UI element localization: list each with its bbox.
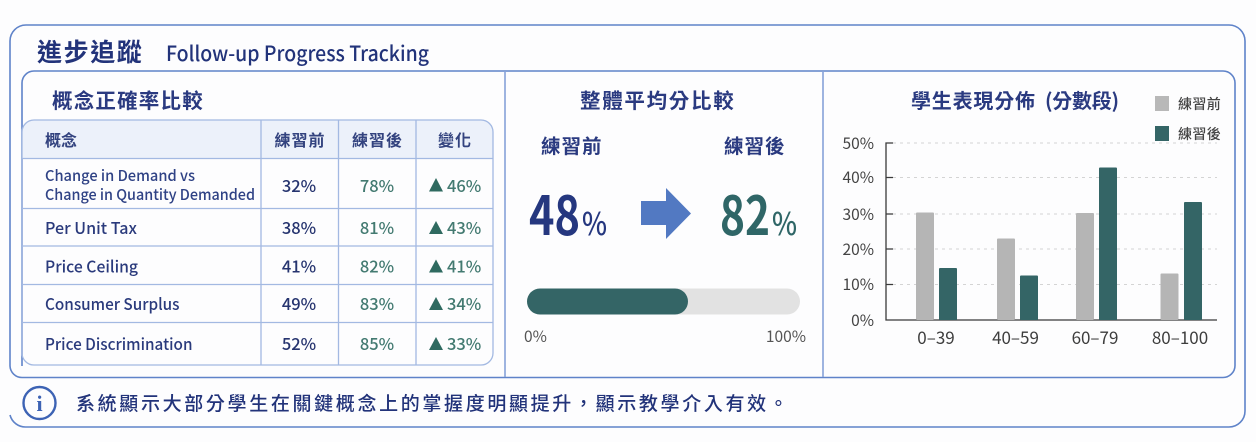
y axis labels	[843, 132, 874, 331]
group 40-59: 40–59	[992, 324, 1039, 349]
y axis labels: 0%	[851, 309, 874, 331]
progress bar	[527, 288, 800, 314]
row: change in demand: Change in Quantity Demanded	[45, 184, 255, 205]
row: consumer surplus: 83%	[360, 291, 394, 315]
label: after practice: 練習後	[724, 130, 786, 159]
callout text: 系統顯示大部分學生在關鍵概念上的掌握度明顯提升，顯示教學介入有效。	[76, 389, 790, 416]
heading: score distribution	[911, 85, 1119, 114]
row: price discrimination: 33%	[447, 331, 481, 355]
progress bar scale labels: 100%	[766, 325, 806, 347]
label: before practice: 練習前	[541, 130, 603, 159]
table header row: 練習前	[274, 127, 326, 151]
heading: concept accuracy: 概念正確率比較	[52, 84, 204, 114]
panel: overall average comparison	[524, 84, 806, 347]
group 0-39	[916, 212, 957, 349]
row: price discrimination: 85%	[360, 331, 394, 355]
group 0-39: 0–39	[917, 324, 955, 349]
row: change in demand	[45, 165, 481, 205]
row: price ceiling	[45, 254, 481, 278]
row: per unit tax: 81%	[360, 215, 394, 239]
y axis labels: 20%	[843, 238, 874, 260]
y axis labels: 40%	[843, 166, 874, 188]
panel: concept accuracy comparison	[22, 84, 493, 365]
row: consumer surplus	[45, 291, 481, 315]
y axis labels: 10%	[843, 273, 874, 295]
y axis labels: 50%	[843, 132, 874, 154]
icon: info: i	[36, 391, 43, 416]
panel: score distribution chart	[843, 85, 1221, 349]
bar chart	[843, 132, 1217, 349]
heading: score distribution: (分數段)	[1045, 85, 1119, 114]
row: change in demand: 78%	[360, 173, 394, 197]
row: per unit tax	[45, 215, 481, 239]
heading: overall average: 整體平均分比較	[580, 84, 735, 114]
icon: info	[24, 387, 56, 419]
title: Follow-up Progress Tracking	[166, 38, 429, 68]
row: change in demand: Change in Demand vs	[45, 165, 195, 186]
title	[37, 33, 429, 69]
table header background	[22, 120, 493, 158]
row: consumer surplus: 34%	[447, 291, 481, 315]
row: price discrimination	[45, 331, 481, 355]
group 80-100	[1152, 202, 1208, 349]
row: price ceiling: Price Ceiling	[45, 254, 138, 278]
table: concept accuracy	[22, 120, 493, 365]
title: 進步追蹤	[37, 33, 143, 69]
table header row: 變化	[438, 127, 472, 151]
callout: conclusion	[24, 387, 790, 419]
group 60-79: 60–79	[1072, 324, 1118, 349]
table header row: 概念	[45, 127, 77, 151]
legend: 練習前	[1178, 94, 1221, 114]
row: change in demand: 32%	[282, 173, 316, 197]
legend	[1155, 94, 1221, 144]
row: per unit tax: 38%	[282, 215, 316, 239]
row: consumer surplus: Consumer Surplus	[45, 291, 180, 315]
score: after 82%: 82	[720, 172, 770, 251]
progress bar scale labels: 0%	[524, 325, 547, 347]
table header row: 練習後	[352, 127, 403, 151]
row: consumer surplus: 49%	[282, 291, 316, 315]
group 80-100: 80–100	[1152, 324, 1208, 349]
score: before 48%: 48	[529, 172, 580, 251]
row: per unit tax: 43%	[447, 215, 481, 239]
group 40-59	[992, 238, 1039, 349]
row: price ceiling: 41%	[282, 254, 316, 278]
progress bar scale labels	[524, 325, 806, 347]
legend: 練習後	[1178, 124, 1221, 144]
score: after 82%: %	[772, 199, 797, 244]
row: price discrimination: Price Discrimination	[45, 331, 192, 355]
row: change in demand: 46%	[447, 173, 481, 197]
arrow	[641, 188, 691, 239]
group 60-79	[1072, 168, 1118, 349]
row: price ceiling: 41%	[447, 254, 481, 278]
row: price discrimination: 52%	[282, 331, 316, 355]
table header row	[45, 127, 472, 151]
score: before 48%: %	[582, 199, 607, 244]
row: per unit tax: Per Unit Tax	[45, 215, 138, 239]
row: price ceiling: 82%	[360, 254, 394, 278]
heading: score distribution: 學生表現分佈	[911, 85, 1035, 114]
y axis labels: 30%	[843, 203, 874, 225]
